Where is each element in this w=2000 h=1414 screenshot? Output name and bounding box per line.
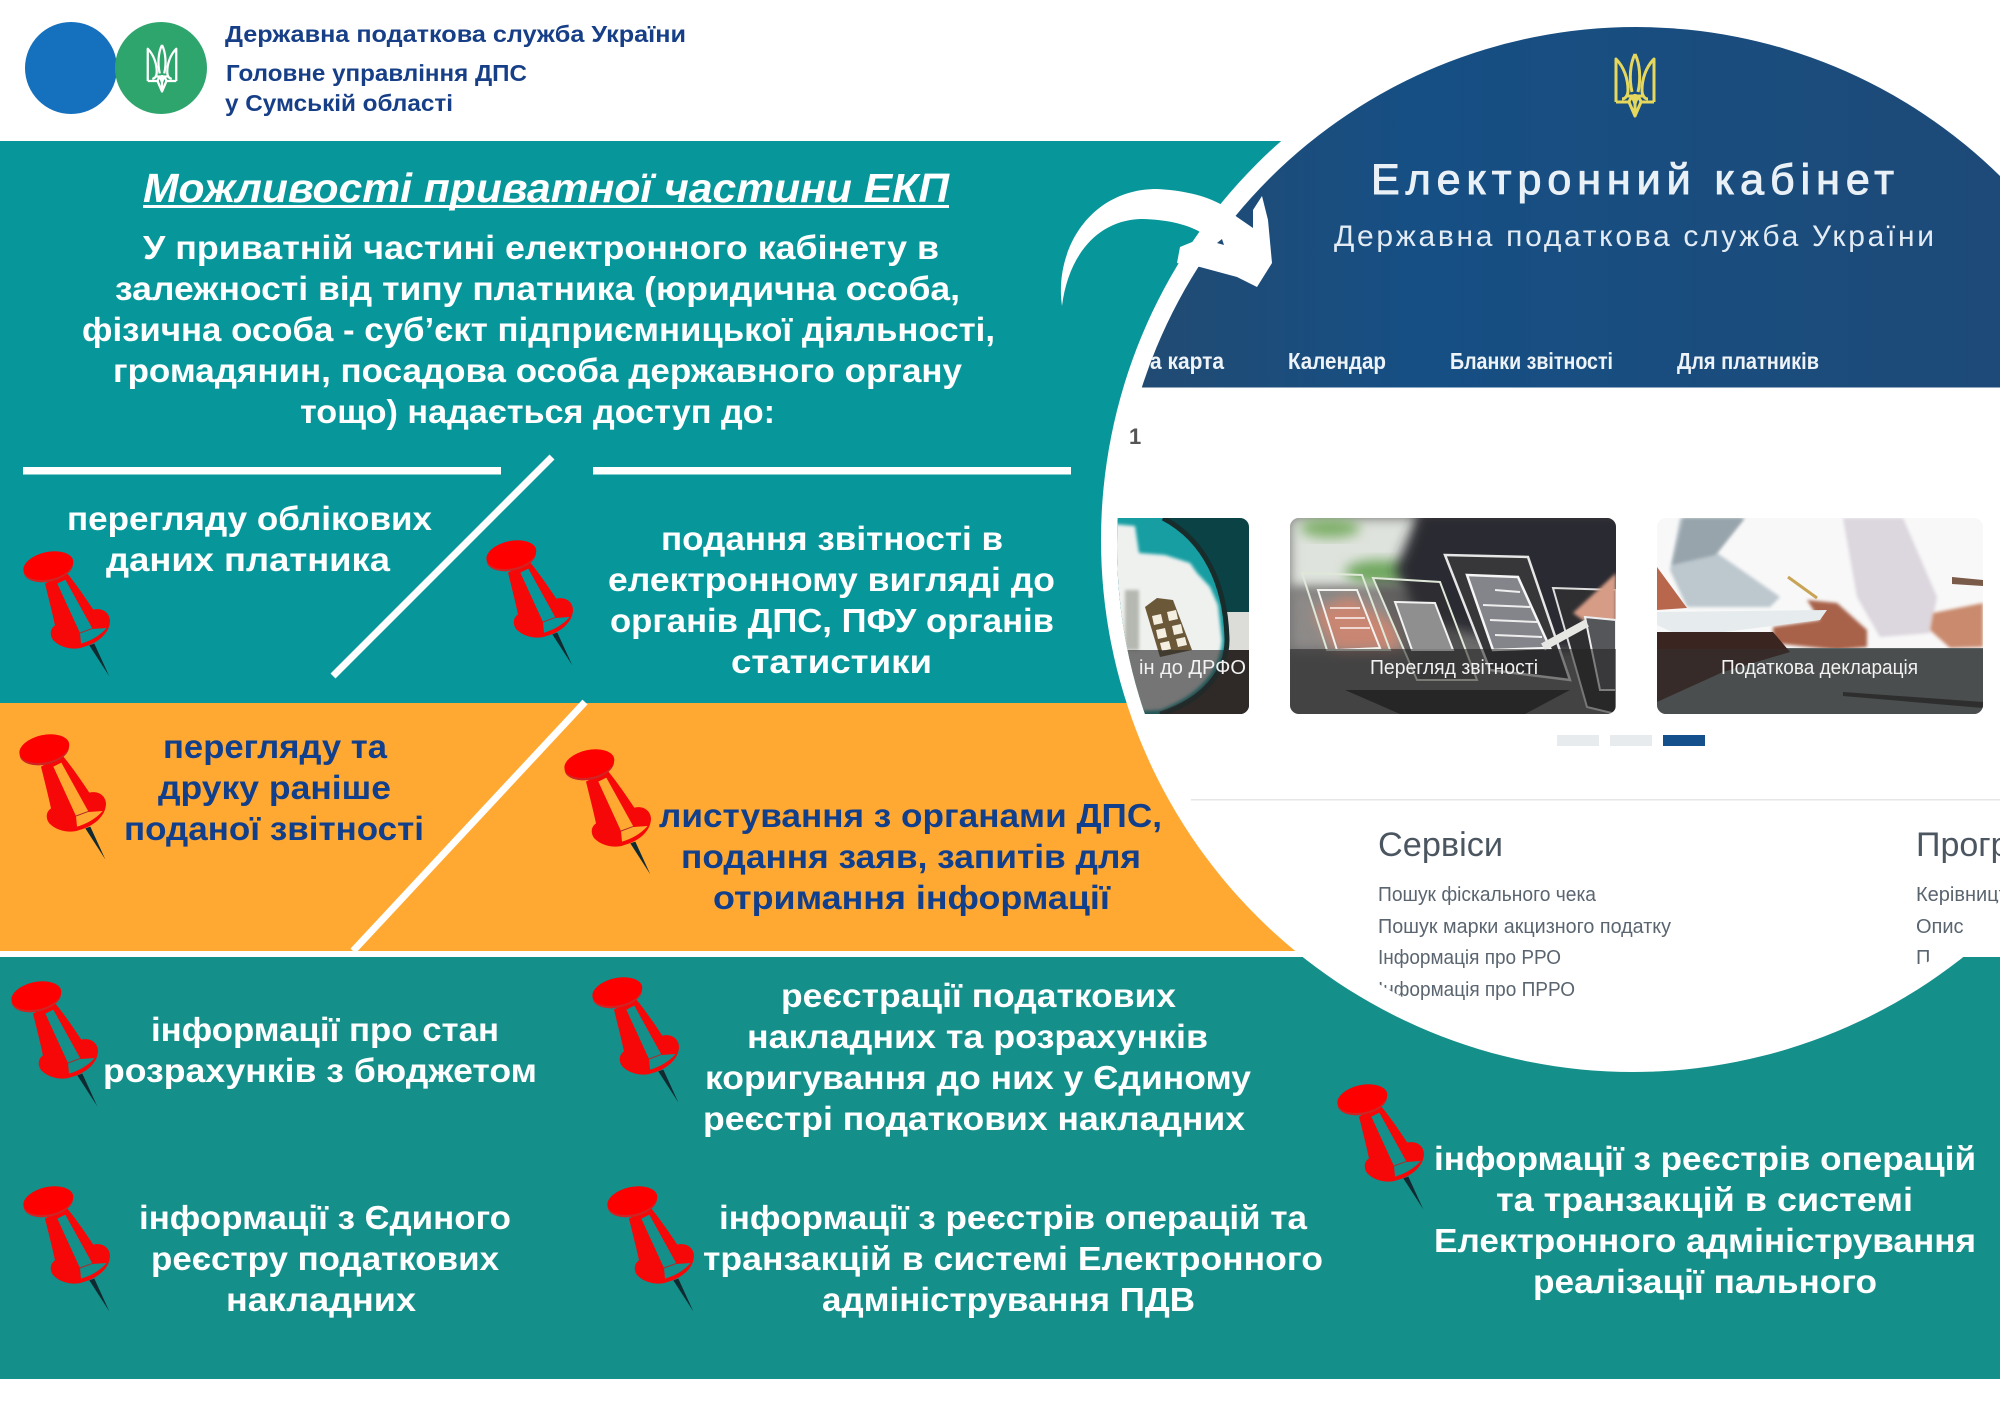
card: tax declaration photo [1657, 518, 1983, 714]
icon: pin account data [21, 547, 110, 676]
programs list [1916, 826, 2000, 969]
text: correspondence: листування з органами ДПС, [659, 797, 1162, 834]
screenshot navigation menu: Бланки звітності [1450, 348, 1613, 374]
arrow: curved white arrow into screenshot [1061, 189, 1272, 306]
logo: blue and green circles with trident [25, 22, 207, 114]
text: VAT registers: інформації з реєстрів операцій та [719, 1199, 1308, 1236]
text: budget settlements: розрахунків з бюджетом [103, 1052, 537, 1089]
header: organisation name: у Сумській області [225, 90, 453, 116]
icon: pin correspondence [562, 745, 651, 874]
text: print submitted reports: друку раніше [158, 769, 391, 806]
screenshot heading: Електронний кабінет [1371, 156, 1894, 204]
text: electronic reporting: подання звітності в [661, 520, 1003, 557]
card caption: Перегляд звітності [1370, 657, 1538, 679]
screenshot circle: Electronic cabinet website [1090, 8, 2000, 1072]
intro paragraph: тощо) надається доступ до: [300, 393, 775, 430]
text: electronic reporting: органів ДПС, ПФУ органів [610, 602, 1054, 639]
services list [1378, 826, 1671, 1001]
header: organisation name: Державна податкова служба України [225, 21, 686, 47]
text: fuel registers: інформації з реєстрів операцій [1434, 1140, 1976, 1177]
icon: pin reporting [484, 536, 573, 665]
text: unified register [139, 1199, 511, 1318]
text: unified register: реєстру податкових [151, 1240, 500, 1277]
text: account data [67, 500, 433, 578]
services list: Інформація про РРО [1378, 947, 1561, 969]
text: electronic reporting: електронному вигляді до [608, 561, 1055, 598]
icon: white trident [148, 45, 176, 92]
icon: pin VAT registers [605, 1182, 694, 1311]
screenshot subheading: Державна податкова служба України [1334, 220, 1934, 253]
screenshot navigation menu: а карта [1150, 348, 1224, 374]
text: electronic reporting: статистики [731, 643, 932, 680]
card: DRFO magnifier photo [1117, 518, 1249, 714]
services list: Інформація про ПРРО [1378, 979, 1575, 1001]
intro paragraph: залежності від типу платника (юридична особа, [115, 270, 960, 307]
text: print submitted reports: перегляду та [163, 728, 388, 765]
text: fuel registers [1434, 1140, 1976, 1300]
icon: pin fuel registers [1335, 1080, 1424, 1209]
programs list: П [1916, 947, 1930, 969]
text: correspondence: подання заяв, запитів для [681, 838, 1141, 875]
text: electronic reporting [608, 520, 1055, 680]
text: unified register: накладних [226, 1281, 417, 1318]
intro paragraph: громадянин, посадова особа державного органу [113, 352, 963, 389]
text: print submitted reports: поданої звітності [124, 810, 424, 847]
panel: upper teal band [0, 141, 1400, 703]
text: tax invoices registration: коригування до них у Єдиному [705, 1059, 1252, 1096]
intro paragraph [82, 229, 995, 430]
text: VAT registers: адміністрування ПДВ [822, 1281, 1195, 1318]
card caption: Податкова декларація [1721, 657, 1918, 679]
icon: pin printing [17, 730, 106, 859]
screenshot navigation menu: Для платників [1677, 348, 1819, 374]
text: account data: даних платника [106, 541, 391, 578]
text: tax invoices registration: реєстрі податкових накладних [703, 1100, 1246, 1137]
intro paragraph: фізична особа - суб’єкт підприємницької діяльності, [82, 311, 995, 348]
text: correspondence: отримання інформації [713, 879, 1111, 916]
screenshot stray digit: 1 [1129, 424, 1141, 449]
card caption: ін до ДРФО [1139, 657, 1246, 679]
header: organisation name [225, 21, 686, 116]
icon: pin budget [9, 977, 98, 1106]
programs list: Опис [1916, 916, 1964, 938]
text: VAT registers: транзакцій в системі Електронного [703, 1240, 1323, 1277]
header: organisation name: Головне управління ДПС [226, 60, 527, 86]
text: print submitted reports [124, 728, 424, 847]
text: budget settlements [103, 1011, 537, 1089]
text: tax invoices registration: реєстрації податкових [781, 977, 1177, 1014]
text: tax invoices registration: накладних та розрахунків [747, 1018, 1208, 1055]
services list: Сервіси [1378, 826, 1503, 864]
screenshot navigation menu: Календар [1288, 348, 1386, 374]
services list: Пошук марки акцизного податку [1378, 916, 1671, 938]
text: tax invoices registration [703, 977, 1252, 1137]
text: budget settlements: інформації про стан [151, 1011, 499, 1048]
card: report view photo [1290, 510, 1630, 714]
screenshot header: blue banner [1100, 20, 2000, 388]
text: account data: перегляду облікових [67, 500, 433, 537]
panel: lower teal band [0, 957, 2000, 1379]
text: fuel registers: та транзакцій в системі [1496, 1181, 1913, 1218]
intro paragraph: У приватній частині електронного кабінету в [143, 229, 939, 266]
text: unified register: інформації з Єдиного [139, 1199, 511, 1236]
text: fuel registers: Електронного адміністрування [1434, 1222, 1976, 1259]
services list: Пошук фіскального чека [1378, 884, 1597, 906]
panel: orange band [0, 703, 1320, 951]
text: fuel registers: реалізації пального [1533, 1263, 1877, 1300]
icon: golden trident [1616, 54, 1654, 116]
icon: pin invoices [590, 973, 679, 1102]
text: VAT registers [703, 1199, 1323, 1318]
carousel indicators [1557, 735, 1705, 746]
screenshot navigation menu [1150, 352, 1818, 374]
title: Можливості приватної частини ЕКП [143, 165, 951, 211]
icon: pin unified register [21, 1182, 110, 1311]
text: correspondence [659, 797, 1162, 916]
